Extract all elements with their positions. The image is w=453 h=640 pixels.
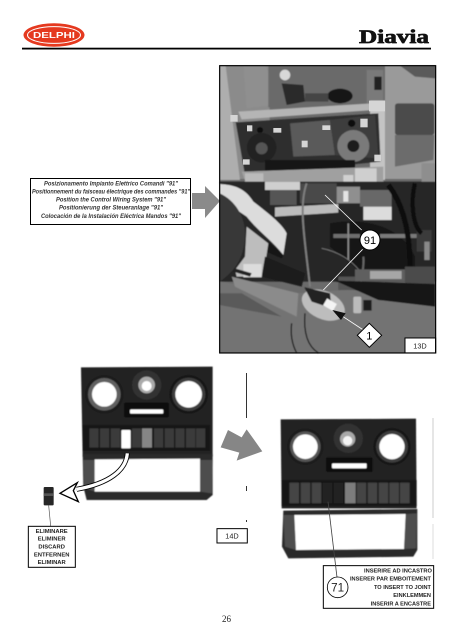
header: Diavia wordmark: Diavia (359, 27, 430, 48)
header: Delphi logo (24, 23, 84, 47)
label: eliminare (28, 526, 75, 567)
label: eliminare: DISCARD (38, 544, 65, 550)
label: eliminare: ELIMINER (38, 537, 66, 543)
callout: 71: 71 (331, 582, 344, 595)
label: eliminare: ELIMINAR (38, 560, 67, 566)
label 14D: 14D (225, 532, 239, 541)
right connector bar (338, 277, 358, 290)
header: Delphi logo: DELPHI (33, 30, 75, 40)
callout: 91: 91 (364, 235, 376, 247)
arrow: grey to right panel (221, 429, 262, 461)
callout: diamond 1 (357, 323, 382, 347)
white mounting clips (230, 101, 385, 165)
photo 13D (220, 66, 436, 353)
label: eliminare: ELIMINARE (36, 529, 68, 535)
caption box: position control wiring: Positionnement du faisceau électrique des commandes "91" (32, 188, 190, 196)
arrow: removal (60, 453, 127, 502)
label 13D (405, 338, 436, 353)
label: inserire (323, 566, 434, 608)
label: inserire: INSERIRE AD INCASTRO (364, 568, 433, 574)
pointer arrowhead (332, 310, 346, 320)
label: inserire: INSERIR A ENCASTRE (371, 602, 431, 608)
caption box: position control wiring: Positionierung der Steueranlage "91" (59, 204, 163, 212)
grommet plate (297, 283, 350, 327)
caption box: position control wiring: Position the Control Wiring System "91" (56, 196, 166, 204)
label 14D (217, 529, 247, 543)
callout: 71 (327, 577, 348, 598)
scan fragments (246, 373, 247, 522)
leader line to switch 71 (328, 502, 337, 577)
upper dash background (220, 66, 270, 179)
label: inserire: EINKLEMMEN (393, 593, 431, 599)
mid section (220, 182, 436, 282)
removed switch (44, 487, 54, 526)
label: inserire: INSERER PAR EMBOITEMENT (350, 576, 432, 582)
leader lines (323, 195, 364, 331)
floor and console (220, 282, 436, 353)
label: eliminare: ENTFERNEN (34, 552, 69, 558)
panel: right control panel with switch inserted (281, 419, 434, 608)
caption box: position control wiring: Colocación de la Instalación Eléctrica Mandos "91" (41, 213, 181, 220)
panel 14D: left control panel with switch removed (28, 367, 262, 567)
hand and glove (220, 184, 287, 255)
arrow: caption to photo (192, 186, 220, 218)
top bar (238, 103, 375, 119)
lower frame (83, 454, 213, 500)
page number: 26 (222, 614, 232, 624)
caption box: position control wiring: Posizionamento Impianto Elettrico Comandi "91" (44, 180, 178, 188)
header rule (22, 48, 431, 50)
callout: 91 (360, 230, 380, 250)
lower bar (242, 167, 383, 185)
label 13D: 13D (413, 341, 427, 350)
callout: diamond 1: 1 (366, 330, 372, 342)
control unit (236, 113, 381, 175)
label: inserire: TO INSERT TO JOINT (374, 585, 432, 591)
photo frame (220, 66, 436, 353)
caption box: position control wiring (30, 178, 190, 224)
